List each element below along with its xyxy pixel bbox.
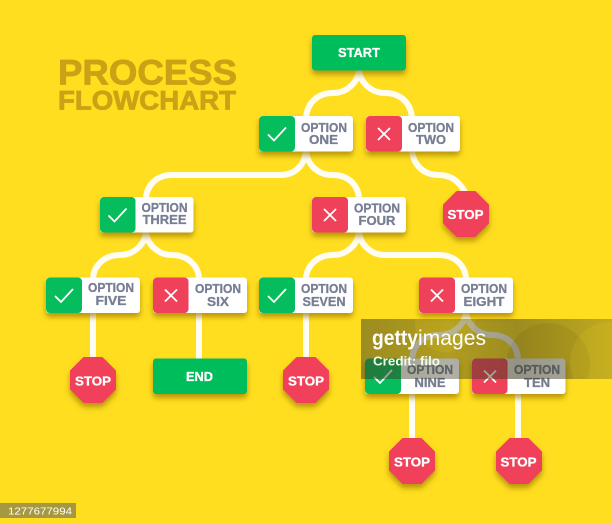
stop after option two bbox=[444, 192, 488, 236]
start box bbox=[312, 35, 406, 70]
option four: OPTION bbox=[354, 202, 400, 216]
option six: OPTION bbox=[195, 282, 241, 296]
option two: TWO bbox=[416, 133, 446, 147]
option four: FOUR bbox=[358, 214, 396, 228]
stop after option nine: STOP bbox=[394, 456, 430, 470]
option six: SIX bbox=[207, 295, 230, 309]
title: PROCESS bbox=[58, 54, 237, 92]
stop after option ten bbox=[497, 439, 541, 483]
option two bbox=[366, 116, 460, 152]
title bbox=[58, 54, 237, 116]
stop after option seven: STOP bbox=[288, 374, 324, 388]
end box: END bbox=[186, 370, 213, 384]
option eight: EIGHT bbox=[464, 295, 505, 309]
option seven bbox=[259, 278, 353, 313]
option eight bbox=[419, 278, 513, 313]
option ten bbox=[472, 358, 566, 394]
watermark band: Credit: filo bbox=[373, 354, 440, 368]
option ten: OPTION bbox=[514, 363, 560, 377]
stop after option five: STOP bbox=[75, 374, 111, 388]
watermark band: getty bbox=[372, 327, 418, 350]
option eight: OPTION bbox=[461, 282, 507, 296]
option six bbox=[153, 278, 247, 313]
watermark band bbox=[361, 319, 612, 379]
stop after option ten: STOP bbox=[500, 456, 536, 470]
option four bbox=[312, 197, 406, 232]
option five bbox=[46, 278, 140, 313]
stop after option five bbox=[71, 358, 115, 402]
start box: START bbox=[338, 46, 380, 60]
option five: OPTION bbox=[88, 281, 134, 295]
option nine: OPTION bbox=[407, 363, 453, 377]
image id tag bbox=[0, 503, 76, 518]
watermark band: images bbox=[418, 327, 486, 350]
option nine: NINE bbox=[414, 376, 446, 390]
option one: ONE bbox=[309, 133, 338, 147]
option seven: SEVEN bbox=[302, 295, 346, 309]
stop after option two: STOP bbox=[448, 208, 484, 222]
image id tag: 1277677994 bbox=[8, 506, 72, 518]
option nine bbox=[365, 358, 459, 394]
connector lines bbox=[93, 68, 518, 440]
end box bbox=[153, 358, 247, 394]
option one: OPTION bbox=[301, 121, 347, 135]
option three: OPTION bbox=[142, 201, 188, 215]
option seven: OPTION bbox=[301, 282, 347, 296]
option one bbox=[259, 116, 353, 152]
stop after option nine bbox=[390, 439, 434, 483]
option two: OPTION bbox=[408, 121, 454, 135]
stop after option seven bbox=[284, 358, 328, 402]
option ten: TEN bbox=[524, 376, 550, 390]
option three bbox=[100, 197, 194, 232]
option three: THREE bbox=[142, 213, 186, 227]
option five: FIVE bbox=[96, 294, 126, 308]
title: FLOWCHART bbox=[58, 86, 236, 116]
